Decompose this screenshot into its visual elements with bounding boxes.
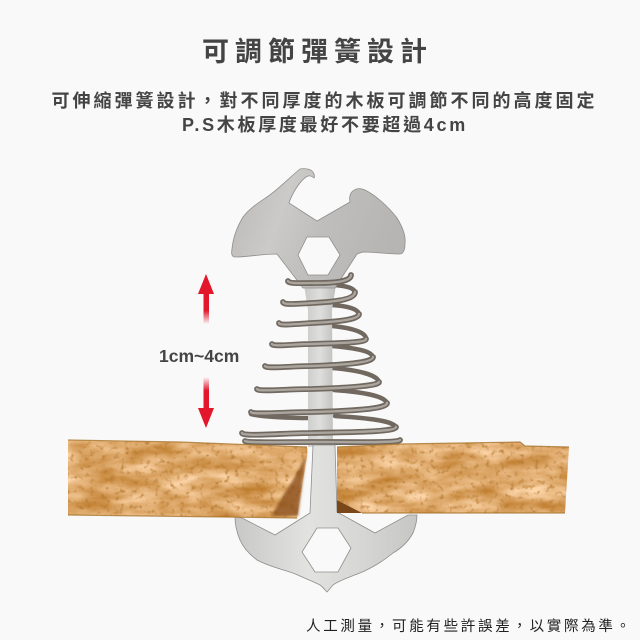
description text: P.S木板厚度最好不要超過4cm [182,114,468,135]
wood board: left piece [68,440,307,518]
stem of upper stake [304,285,336,447]
wood cut shadow: right [337,500,362,513]
description text [52,90,598,135]
description text: 可伸縮彈簧設計，對不同厚度的木板可調節不同的高度固定 [52,90,598,111]
top stake head [232,169,405,288]
wood board: right piece [337,442,569,513]
bottom stake head [235,445,417,592]
spring front strands [242,275,400,442]
spring back strands [251,285,396,428]
height label: 1cm~4cm [159,346,239,366]
product illustration: spring stake through wood board [68,169,569,592]
wood cut shadow: left [272,456,306,516]
arrow down [198,377,214,428]
wood edge lines [68,440,569,518]
footnote: 人工測量，可能有些許誤差，以實際為準。 [306,617,633,635]
title: 可調節彈簧設計 [202,37,433,67]
arrow up [198,274,214,324]
